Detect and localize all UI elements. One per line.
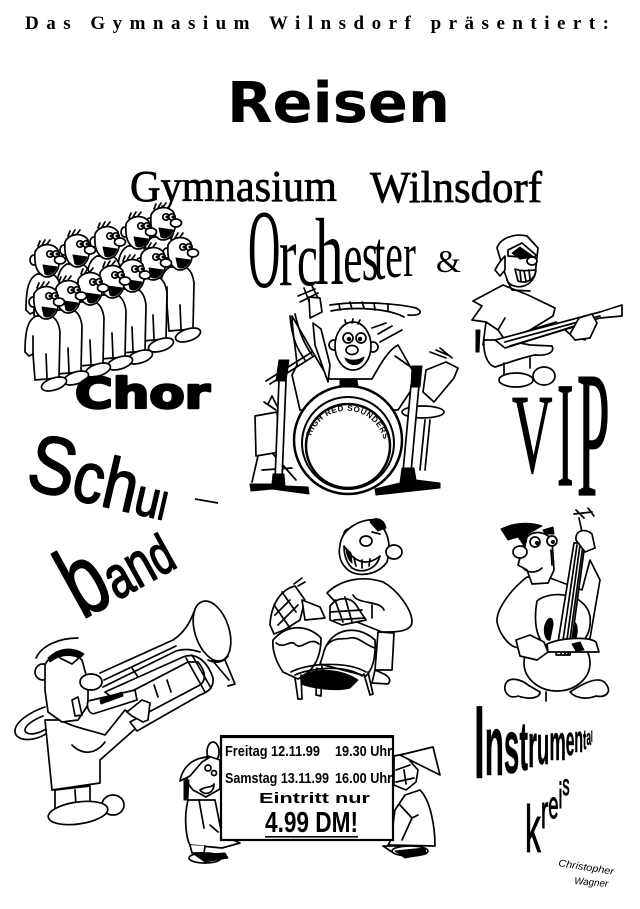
label: Instrumental: n [485,698,504,794]
heading: Orchester and: h [315,199,344,305]
right hand on bongo [330,599,366,625]
heading: Orchester and: t [374,218,385,295]
drummer arms and body [290,314,418,410]
trombone slide and bell [100,596,238,731]
label: VIP: V [512,373,552,497]
info sign: dates and admission [220,735,394,840]
illustration: choir [25,203,202,394]
guitar neck [495,305,622,348]
Saturday line: Samstag 13.11.99 [225,770,329,787]
label: kreis: r [541,786,548,838]
label: kreis: e [548,785,558,827]
trombonist head [35,638,150,722]
Friday line: 19.30 Uhr [335,743,392,760]
cellist head [501,523,557,584]
Friday line [225,743,392,760]
guitarist head with cap and sunglasses [495,235,538,291]
heading: Orchester and: c [297,216,318,302]
label: kreis: i [558,775,562,816]
label: band: band [39,488,190,639]
label: VIP: I [557,352,573,519]
cello neck and strings [556,508,594,655]
left hand on bongo [270,586,305,634]
illustration: guitarist [472,235,622,387]
label: Instrumental: r [528,711,537,780]
heading: Gymnasium Wilnsdorf: Wilnsdorf [370,163,542,212]
heading: Orchester and: & [436,243,461,279]
Saturday line: 16.00 Uhr [335,770,392,787]
heading: Orchester and: s [362,216,379,296]
illustration: bongo player [270,519,412,699]
label: Instrumental: t [583,725,586,756]
heading: Orchester and [248,189,461,312]
cello body [524,595,590,691]
illustration: person holding sign left [180,742,240,863]
shoes [47,795,124,828]
label: kreis: s [562,768,570,801]
label: Instrumental: u [537,714,549,776]
label: Instrumental: n [574,719,583,761]
price: 4.99 DM! [265,807,358,839]
signature: Wagner [574,876,609,890]
cymbal and right hand [402,348,458,470]
illustration: drummer [250,286,459,496]
heading: Orchester and: r [403,221,416,291]
label: Instrumental: l [591,727,593,746]
label: Instrumental: a [586,725,591,750]
cellist torso [497,560,600,655]
label: kreis: k [525,792,541,866]
signature: Christopher [558,858,615,878]
label: Instrumental: t [519,708,528,786]
label: Chor: Chor [75,369,210,418]
floor tom [252,396,296,482]
hyphen [195,499,218,503]
label: Schul: Schul [20,417,180,538]
tuning slide behind [15,707,47,740]
drumsticks and motion swirl [298,286,420,342]
cello bridge and hand [516,531,599,660]
illustration: cellist [497,508,608,701]
guitarist shirt and arm [472,285,555,340]
heading: Orchester and: e [385,219,403,292]
bass drum [292,380,404,496]
guitarist feet [499,358,555,387]
heading: Orchester and: r [279,207,296,304]
front row of singers [25,233,202,394]
illustration: trombonist [15,596,238,828]
cellist feet [505,679,608,701]
guitar body [484,340,553,367]
heading: Gymnasium Wilnsdorf [130,162,542,212]
fretting hand [570,314,597,340]
Friday line: Freitag 12.11.99 [225,743,320,760]
back row of singers [26,203,185,352]
bongo drums [273,628,375,699]
label: VIP: P [577,335,610,534]
body and arm [45,710,143,790]
heading: Orchester and: e [343,218,362,298]
label: Instrumental: m [549,715,566,771]
bass drum: HIGH RED SOUNDERS [306,405,388,439]
label: VIP [512,335,610,534]
bongo player head [339,519,402,574]
label: Instrumental: s [504,705,519,789]
signature [558,858,615,890]
label: Instrumental: I [474,684,485,801]
illustration: person holding sign right [383,747,440,858]
label: Instrumental: e [566,717,574,764]
heading: Reisen: Reisen [227,71,450,136]
drummer head [329,319,378,370]
drum stands [250,352,440,495]
heading: Gymnasium Wilnsdorf: Gymnasium [130,162,337,211]
admission: Eintritt nur [259,790,370,807]
title: presenter line: Das Gymnasium Wilnsdorf präsentiert: [25,13,609,34]
heading: Orchester and: O [248,189,280,312]
